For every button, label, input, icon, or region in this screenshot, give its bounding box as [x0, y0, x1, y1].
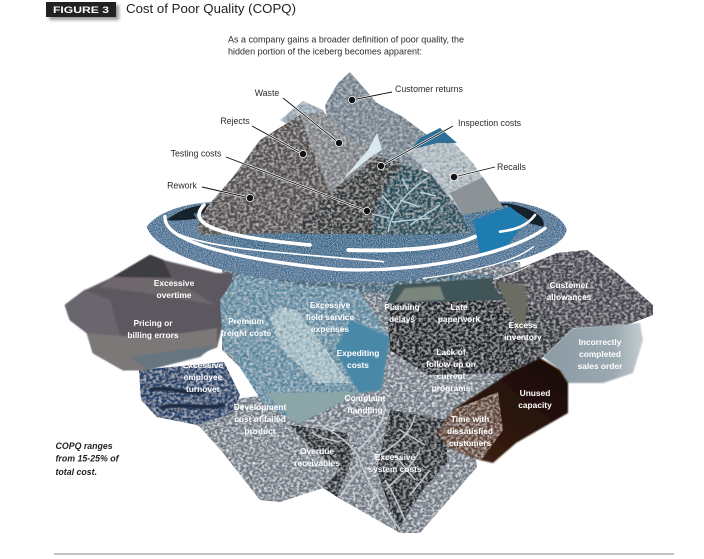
right pale ice face: [407, 128, 503, 215]
note: COPQ range: from 15-25% of: [56, 454, 120, 464]
left mass bands: [65, 255, 217, 370]
intro text: hidden portion of the iceberg becomes apparent:: [228, 46, 422, 58]
dark frond zones: [290, 410, 447, 530]
label: Customer allowances: Customer: [549, 280, 589, 290]
upper centre ledge: [387, 278, 507, 303]
label: Premium freight costs: freight costs: [221, 328, 271, 338]
label: Recalls: Recalls: [497, 162, 526, 172]
white swirl highlights: [165, 205, 545, 279]
title: Cost of Poor Quality (COPQ): [126, 2, 296, 16]
label: Waste: Waste: [255, 88, 279, 98]
khaki strip: [497, 282, 530, 330]
upper iceberg peaks: [197, 72, 503, 236]
label: Excess inventory: Excess: [509, 320, 537, 330]
label: Expediting costs: Expediting: [337, 348, 379, 358]
water ring: [147, 202, 567, 283]
label: Excessive system costs: system costs: [368, 464, 422, 474]
label: Complaint handling: Complaint: [345, 393, 385, 403]
label: Planning delays: delays: [389, 314, 415, 324]
back peak: [325, 72, 427, 200]
label: Development cost of failed product: cost of failed: [234, 414, 286, 424]
label: Excessive overtime: Excessive: [154, 278, 194, 288]
label: Development cost of failed product: product: [244, 426, 276, 436]
label: Inspection costs: Inspection costs: [458, 118, 522, 128]
label: Time with dissatisfied customers: Time with: [451, 414, 489, 424]
label: Excessive overtime: overtime: [157, 290, 192, 300]
label: Lack of follow-up on current programs: Lack of: [436, 347, 466, 357]
label: Excess inventory: inventory: [504, 332, 542, 342]
teal peak: [372, 165, 470, 236]
brown block: [437, 358, 568, 463]
base fill behind lower facets: [222, 262, 525, 425]
lower ice shelf: [232, 266, 500, 300]
grey facet: [265, 392, 359, 424]
label: Excessive employee turnover: employee: [184, 372, 223, 382]
label: Time with dissatisfied customers: customers: [449, 438, 492, 448]
bottom mottled mass: [190, 340, 500, 533]
label: Unused capacity: Unused: [520, 388, 550, 398]
right upper grey: [490, 250, 653, 357]
pale fronds: [312, 405, 430, 530]
blue lump: [139, 362, 240, 425]
callout lines and dots: [202, 92, 495, 215]
label: Time with dissatisfied customers: dissatisfied: [447, 426, 493, 436]
label: Incorrectly completed sales order: sales order: [578, 361, 623, 371]
intro text: [228, 34, 464, 58]
label: Excessive field service expenses: Excessive: [310, 300, 350, 310]
dark centre: [387, 300, 523, 375]
blue ice edge: [410, 128, 457, 150]
label: Unused capacity: capacity: [518, 400, 552, 410]
label: Rejects: Rejects: [220, 116, 250, 126]
label: Development cost of failed product: Development: [234, 402, 286, 412]
label: Customer allowances: allowances: [547, 292, 592, 302]
figure badge: [46, 2, 119, 20]
label: Excessive employee turnover: Excessive: [183, 360, 223, 370]
left mountain, light side: [290, 112, 378, 200]
deep blue right facet: [335, 320, 390, 393]
inventory block: [517, 303, 573, 373]
label: Rework: Rework: [167, 180, 198, 190]
label: Excessive system costs: Excessive: [375, 452, 415, 462]
label: Overdue receivables: receivables: [294, 458, 340, 468]
pale ice streak: [270, 307, 350, 383]
label: Excessive employee turnover: turnover: [186, 384, 221, 394]
note: COPQ range: COPQ ranges: [56, 441, 113, 451]
label: Excessive field service expenses: expenses: [311, 324, 349, 334]
label: Lack of follow-up on current programs: follow-up on: [426, 359, 476, 369]
label: Lack of follow-up on current programs: current: [437, 371, 466, 381]
grey shadow facet: [450, 177, 503, 215]
pale grey right lobe: [543, 323, 643, 383]
coral fronds: [372, 178, 440, 232]
small pale peak: [280, 101, 353, 160]
white crest: [333, 133, 382, 192]
label: Incorrectly completed sales order: Incorrectly: [579, 337, 621, 347]
label: Pricing or billing errors: billing errors: [127, 330, 179, 340]
note: COPQ range: total cost.: [56, 467, 97, 477]
intro text: As a company gains a broader definition of poor quality, the: [228, 34, 464, 46]
label: Late paperwork: paperwork: [438, 314, 481, 324]
label: Testing costs: Testing costs: [171, 148, 222, 158]
dark middle slope: [300, 157, 403, 234]
label: Lack of follow-up on current programs: programs: [432, 383, 471, 393]
label: Customer returns: Customer returns: [395, 84, 464, 94]
label: Planning delays: Planning: [384, 302, 420, 312]
lower iceberg: [65, 250, 653, 533]
label: Late paperwork: Late: [450, 302, 468, 312]
panel: iceberg illustration: [65, 72, 653, 533]
label: Complaint handling: handling: [348, 405, 382, 415]
figure badge: FIGURE 3: [53, 5, 109, 16]
label: Expediting costs: costs: [347, 360, 369, 370]
label: Premium freight costs: Premium: [228, 316, 264, 326]
label: Excessive field service expenses: field service: [306, 312, 355, 322]
light blue ice: [220, 274, 390, 424]
left grey mass: [65, 255, 237, 370]
label: Incorrectly completed sales order: completed: [579, 349, 621, 359]
dark left mountain: [197, 115, 335, 235]
label: Pricing or billing errors: Pricing or: [133, 318, 173, 328]
label: Overdue receivables: Overdue: [300, 446, 334, 456]
